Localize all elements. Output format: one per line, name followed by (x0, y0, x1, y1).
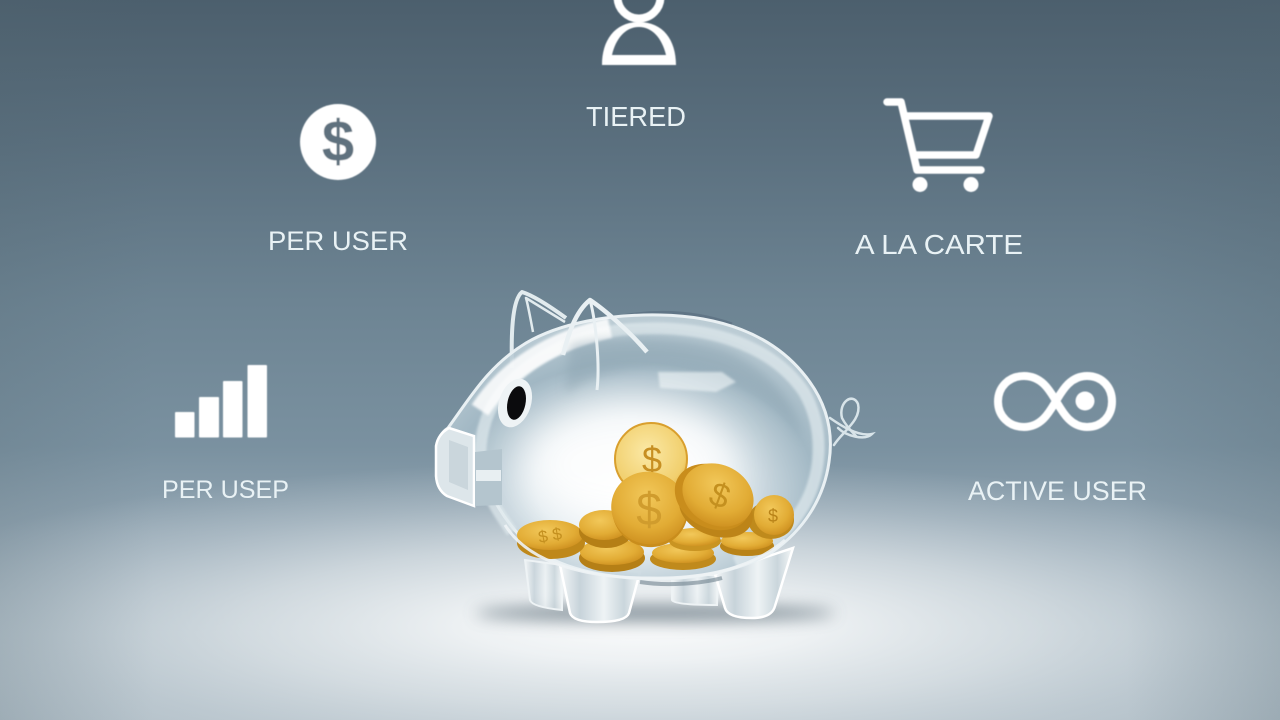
icon: shopping cart (887, 102, 989, 192)
coin: mid left (579, 510, 633, 548)
glass rim shading (480, 328, 819, 562)
illustration: glass piggy bank with coins (436, 292, 872, 622)
label: tiered: TIERED (586, 101, 686, 132)
coins (517, 423, 794, 572)
eye (492, 374, 538, 432)
coin: lower centre (650, 543, 716, 570)
centre glow (525, 405, 735, 525)
floor shadow (475, 604, 835, 622)
dark interior upper reflection (565, 338, 803, 440)
coin: far right: $ (768, 506, 778, 526)
icon: person (tiered) (602, 0, 676, 65)
pig body (437, 315, 830, 579)
coin: far left (517, 520, 585, 559)
label: a la carte: A LA CARTE (855, 229, 1023, 260)
coin: far left: $ $ (537, 524, 564, 547)
coin: upright back (615, 423, 687, 495)
coin: lower right (669, 528, 774, 556)
label: per user: PER USER (268, 226, 408, 256)
snout (436, 428, 502, 506)
pig legs (525, 548, 793, 622)
icon: infinity with dot (998, 376, 1112, 427)
body highlights (658, 372, 736, 392)
pig tail (830, 399, 872, 445)
label: active user: ACTIVE USER (968, 476, 1147, 506)
icon: dollar coin: $ (322, 109, 354, 174)
coin: far right (748, 495, 794, 539)
coin slot (622, 312, 732, 324)
coin: big right: $ (704, 475, 735, 517)
underside shadow (640, 578, 722, 584)
coin: upright back: $ (642, 439, 662, 480)
label: per usep: PER USEP (162, 476, 289, 504)
bottom rim of body (505, 525, 785, 578)
coin: big front (601, 461, 698, 558)
icon: dollar coin (300, 104, 376, 180)
pig ear back (512, 292, 566, 368)
coin: big right (663, 451, 765, 547)
coin: lower left (579, 539, 645, 572)
icon: bar chart (175, 365, 267, 438)
coin: big front: $ (636, 483, 662, 535)
ear front (563, 300, 647, 390)
